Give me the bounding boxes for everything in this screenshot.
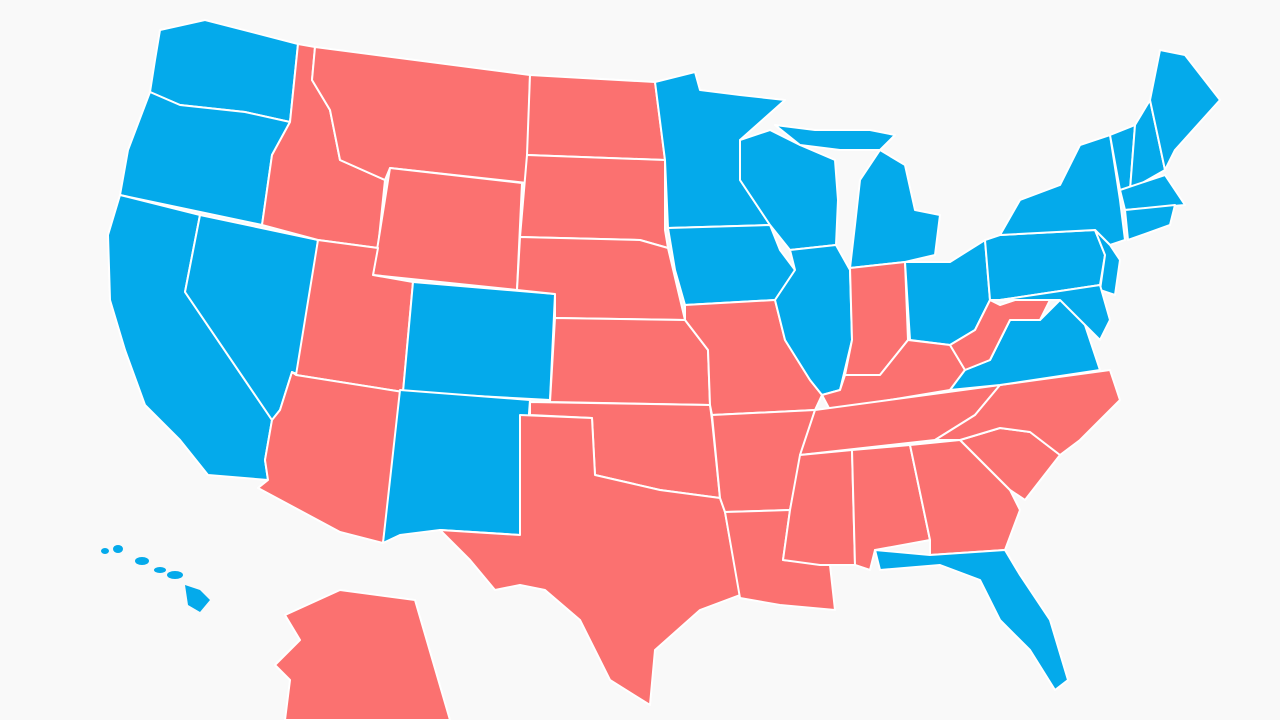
state: Michigan (775, 125, 940, 268)
state: Georgia (910, 440, 1020, 555)
state: Idaho (262, 44, 385, 248)
state: Montana (312, 47, 530, 183)
state: Utah (296, 240, 413, 392)
state: Massachusetts (1120, 175, 1185, 210)
state: New Mexico (383, 390, 530, 543)
state: Arkansas (712, 410, 815, 512)
state: Illinois (775, 245, 852, 395)
state: Wisconsin (740, 130, 838, 250)
state: Texas (440, 415, 740, 705)
state: New Hampshire (1130, 100, 1165, 190)
state: Colorado (403, 282, 555, 400)
state: Indiana (845, 262, 908, 375)
state: Washington (150, 20, 298, 122)
state: Arizona (258, 372, 403, 543)
state: Mississippi (783, 450, 855, 565)
state: Nebraska (517, 237, 685, 320)
state: Iowa (668, 225, 795, 305)
state: Hawaii (101, 545, 210, 612)
state: California (108, 195, 272, 480)
state: South Carolina (960, 428, 1060, 500)
state: Louisiana (725, 510, 835, 610)
state: North Carolina (935, 370, 1120, 455)
state: Florida (875, 550, 1068, 690)
state: Vermont (1110, 125, 1135, 190)
state: Missouri (685, 300, 822, 415)
state: Wyoming (373, 168, 522, 290)
state: Pennsylvania (985, 230, 1105, 300)
state: Virginia (950, 300, 1100, 390)
state: Maine (1150, 50, 1220, 170)
state: New Jersey (1095, 230, 1120, 295)
state: Alaska (275, 590, 450, 720)
state: North Dakota (527, 75, 665, 160)
state: West Virginia (950, 300, 1050, 370)
state: Kansas (550, 318, 710, 405)
state: Alabama (852, 445, 930, 570)
state: South Dakota (520, 155, 668, 248)
state: Maryland/Delaware (1000, 285, 1110, 340)
state: Oklahoma (530, 402, 720, 498)
state: Ohio (905, 240, 990, 345)
state: Oregon (120, 92, 290, 225)
state: Connecticut/Rhode Island (1125, 205, 1175, 240)
state: Kentucky (822, 340, 965, 410)
state: New York (1000, 135, 1125, 245)
state: Minnesota (655, 72, 785, 228)
state: Tennessee (800, 385, 1000, 455)
state: Nevada (185, 215, 318, 420)
